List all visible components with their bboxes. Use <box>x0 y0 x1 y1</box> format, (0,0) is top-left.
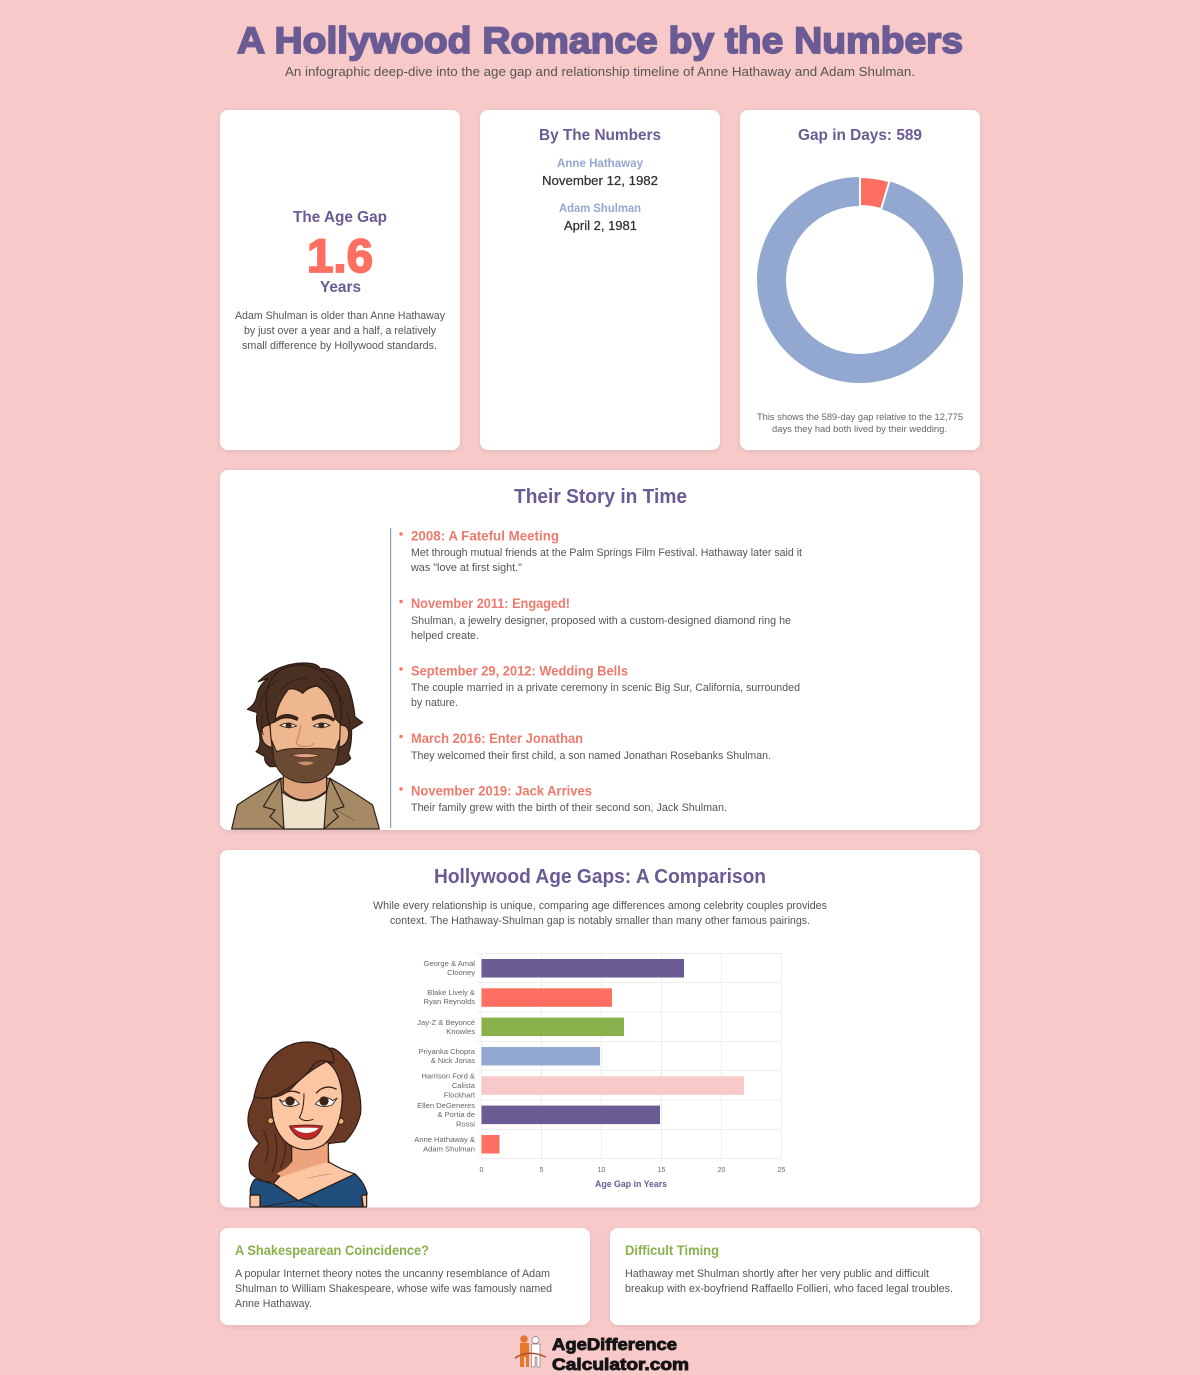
event: November 2019: Their family grew with the birth of their second son, Jack Shulman. <box>411 802 727 814</box>
text: age gap description: Adam Shulman is older than Anne Hathaway <box>235 310 445 322</box>
category labels: Knowles <box>446 1027 475 1036</box>
category labels <box>414 959 476 1154</box>
heading: the age gap: The Age Gap <box>293 209 387 226</box>
event: November 2011: helped create. <box>411 630 479 642</box>
category labels: Adam Shulman <box>423 1144 475 1154</box>
category labels: Ellen DeGeneres <box>417 1101 475 1110</box>
panel: Hollywood age gaps comparison <box>220 850 980 1208</box>
panel: the age gap <box>220 110 460 450</box>
unit: years: Years <box>320 279 361 296</box>
bar: Ellen DeGeneres & Portia de Rossi <box>482 1106 660 1124</box>
bar: George & Amal Clooney <box>482 959 684 978</box>
heading: gap in days: Gap in Days: 589 <box>798 127 922 144</box>
bar: Priyanka Chopra & Nick Jonas <box>482 1047 600 1066</box>
timeline axis <box>390 528 391 828</box>
subtitle: An infographic deep-dive into the age gap and relationship timeline of Anne Hathaway and Adam Shulman. <box>285 65 915 79</box>
text: difficult timing: Hathaway met Shulman shortly after her very public and difficult <box>625 1268 929 1280</box>
category labels: Clooney <box>447 968 475 977</box>
axis tick labels: 25 <box>778 1167 785 1174</box>
axis title: Age Gap in Years <box>595 1179 667 1189</box>
category labels: Rossi <box>456 1120 475 1128</box>
logo: AgeDifferenceCalculator.com <box>515 1335 689 1374</box>
event: November 2019 <box>399 782 727 814</box>
text: difficult timing <box>625 1268 953 1295</box>
text: difficult timing: breakup with ex-boyfriend Raffaello Follieri, who faced legal troubles. <box>625 1283 953 1295</box>
text: age gap description: small difference by Hollywood standards. <box>242 340 437 352</box>
label: Anne Hathaway: Anne Hathaway <box>557 158 644 170</box>
heading: by the numbers: By The Numbers <box>539 127 661 144</box>
text: age gap description <box>235 310 445 352</box>
axis tick labels: 5 <box>540 1167 544 1174</box>
title: A Hollywood Romance by the Numbers <box>237 20 963 61</box>
birth date: Adam: April 2, 1981 <box>564 218 637 233</box>
event: November 2011: November 2011: Engaged! <box>411 595 570 611</box>
category labels: Flockhart <box>444 1090 476 1100</box>
category labels: & Nick Jonas <box>431 1056 475 1065</box>
bar: Jay-Z & Beyoncé Knowles <box>482 1018 624 1036</box>
axis tick labels: 10 <box>598 1167 605 1174</box>
category labels: Harrison Ford & <box>421 1072 475 1080</box>
event: March 2016: March 2016: Enter Jonathan <box>411 730 583 746</box>
caption: donut: This shows the 589-day gap relative to the 12,775 <box>757 412 963 422</box>
logo wordmark: AgeDifference <box>552 1336 677 1354</box>
heading: Shakespearean coincidence: A Shakespearean Coincidence? <box>235 1242 429 1258</box>
heading: difficult timing: Difficult Timing <box>625 1242 719 1258</box>
label: Adam Shulman: Adam Shulman <box>559 203 641 215</box>
logo wordmark: Calculator.com <box>552 1356 689 1374</box>
category labels: Ryan Reynolds <box>424 997 475 1006</box>
axis tick labels: 15 <box>658 1167 665 1174</box>
category labels: Blake Lively & <box>427 988 475 997</box>
caption: donut <box>757 412 963 434</box>
illustration: Adam Shulman <box>232 663 379 829</box>
axis tick labels: 0 <box>480 1167 484 1174</box>
bar: Harrison Ford & Calista Flockhart <box>482 1076 744 1095</box>
text: comparison intro <box>373 900 827 927</box>
event: 2008: Met through mutual friends at the Palm Springs Film Festival. Hathaway later said it <box>411 547 802 559</box>
event: March 2016: They welcomed their first child, a son named Jonathan Rosebanks Shulman. <box>411 750 771 762</box>
text: Shakespeare theory: Shulman to William Shakespeare, whose wife was famously named <box>235 1283 552 1295</box>
heading: comparison: Hollywood Age Gaps: A Comparison <box>434 866 766 888</box>
panel: by the numbers <box>480 110 720 450</box>
category labels: Priyanka Chopra <box>418 1047 476 1056</box>
panel: gap in days <box>740 110 980 450</box>
icon: two people with arc <box>515 1335 546 1367</box>
category labels: & Portia de <box>437 1110 475 1119</box>
panel: difficult timing <box>610 1228 980 1325</box>
event: November 2011: Shulman, a jewelry designer, proposed with a custom-designed diamond ring he <box>411 615 791 627</box>
event: 2008: was "love at first sight." <box>410 562 522 574</box>
logo wordmark <box>552 1336 689 1374</box>
event: September 2012: The couple married in a private ceremony in scenic Big Sur, California, surrounded <box>411 682 800 694</box>
axis tick labels <box>480 1167 785 1174</box>
event: September 2012: by nature. <box>411 697 458 709</box>
text: comparison intro: context. The Hathaway-Shulman gap is notably smaller than many other famous pairings. <box>390 915 810 927</box>
bar: Anne Hathaway & Adam Shulman <box>482 1135 500 1154</box>
caption: donut: days they had both lived by their wedding. <box>772 424 947 434</box>
panel: their story in time <box>220 470 980 830</box>
big number: 1.6: 1.6 <box>307 229 373 282</box>
event: September 2012: September 29, 2012: Wedding Bells <box>411 662 628 678</box>
category labels: Calista <box>452 1081 476 1090</box>
bar chart <box>414 953 785 1189</box>
text: Shakespeare theory: A popular Internet theory notes the uncanny resemblance of Adam <box>235 1268 550 1280</box>
category labels: Anne Hathaway & <box>414 1135 475 1144</box>
event: November 2019: November 2019: Jack Arrives <box>411 782 592 798</box>
event: 2008: 2008: A Fateful Meeting <box>411 528 559 544</box>
event: 2008 <box>399 528 802 574</box>
birth date: Anne: November 12, 1982 <box>542 173 658 188</box>
category labels: Jay-Z & Beyoncé <box>417 1018 475 1027</box>
event: September 2012 <box>399 662 800 709</box>
category labels: George & Amal <box>424 959 475 968</box>
heading: their story in time: Their Story in Time <box>514 486 687 508</box>
panel: Shakespearean coincidence <box>220 1228 590 1325</box>
text: comparison intro: While every relationship is unique, comparing age differences among celebrity couples provides <box>373 900 827 912</box>
illustration: Anne Hathaway <box>248 1042 367 1207</box>
axis tick labels: 20 <box>718 1167 725 1174</box>
bar: Blake Lively & Ryan Reynolds <box>482 988 612 1007</box>
donut chart <box>772 177 948 368</box>
text: Shakespeare theory <box>235 1268 552 1310</box>
event: March 2016 <box>399 730 771 762</box>
text: Shakespeare theory: Anne Hathaway. <box>235 1298 312 1310</box>
event: November 2011 <box>399 595 791 642</box>
text: age gap description: by just over a year and a half, a relatively <box>244 325 436 337</box>
